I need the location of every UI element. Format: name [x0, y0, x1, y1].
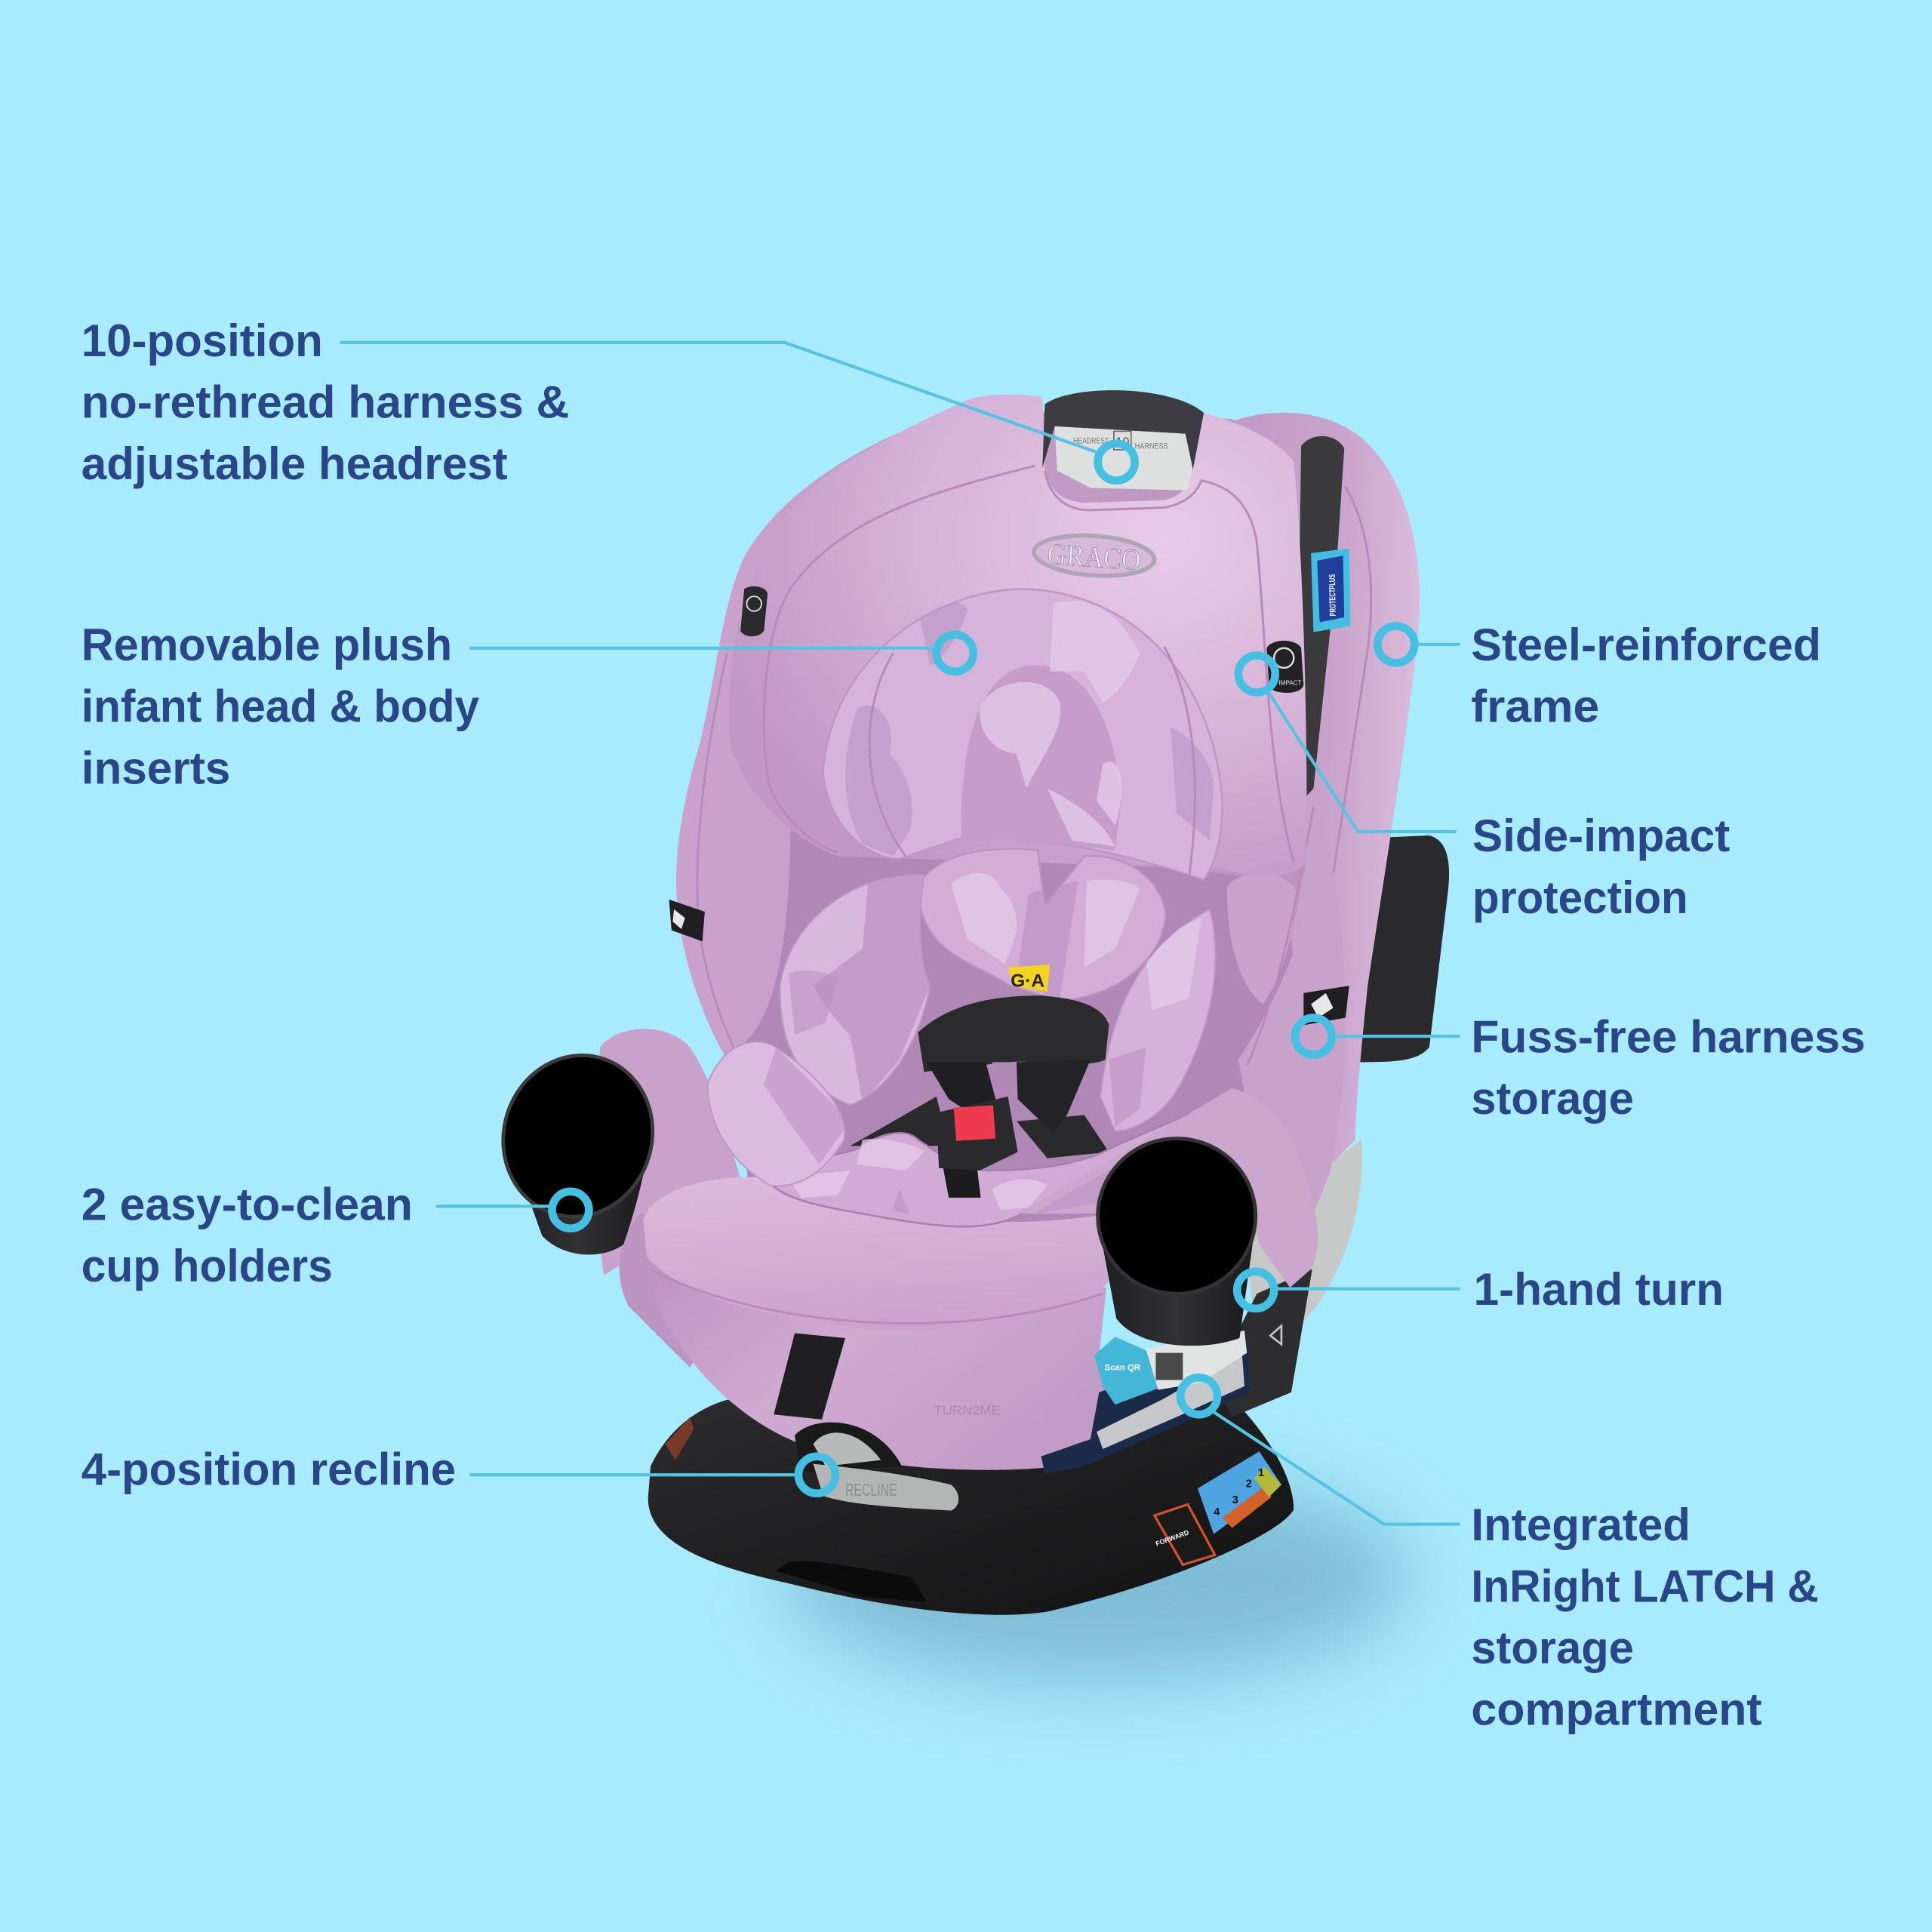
outer left seat side — [620, 1214, 740, 1367]
cast shadow — [783, 1472, 1411, 1682]
callout: infant inserts: Removable plush — [82, 619, 452, 670]
installation labels: Scan QR — [1105, 1364, 1140, 1373]
recline level sticker — [1198, 1451, 1281, 1534]
dark shadow beside buckle left — [851, 1097, 949, 1146]
recline level sticker: 1 — [1258, 1467, 1264, 1479]
seat bucket front — [646, 1257, 1106, 1470]
dark shadow beside buckle right — [1017, 1115, 1109, 1158]
recline level sticker: 2 — [1246, 1478, 1252, 1491]
callout: 10-position harness: no-rethread harness & — [82, 376, 569, 427]
ProtectPlus tag — [1311, 549, 1350, 632]
cushion seam — [651, 1269, 1103, 1323]
strap tag icon left — [672, 909, 685, 929]
callout: harness storage: Fuss-free harness — [1471, 1011, 1866, 1062]
right armrest — [1017, 1088, 1318, 1287]
left armrest — [592, 1029, 742, 1275]
armrest pattern — [1035, 1140, 1171, 1214]
headrest panel — [729, 395, 1306, 875]
callout: LATCH: compartment — [1471, 1684, 1762, 1735]
callout: cup holders: 2 easy-to-clean — [82, 1178, 413, 1229]
Turn2Me text: TURN2ME — [934, 1402, 1001, 1417]
left shoulder pad — [780, 869, 931, 1105]
callout: recline: 4-position recline — [82, 1443, 456, 1494]
callout: harness storage — [1295, 1011, 1866, 1124]
callout: harness storage: storage — [1471, 1072, 1634, 1124]
callout: cup holders — [82, 1178, 589, 1291]
rear black side panel — [1355, 835, 1449, 1062]
callout: infant inserts — [82, 619, 974, 793]
recline level sticker: 4 — [1214, 1506, 1220, 1518]
base red sticker left — [666, 1417, 694, 1460]
side bolster right — [1227, 874, 1297, 1004]
callout: recline — [82, 1443, 835, 1494]
callout: side impact — [1238, 656, 1730, 923]
yellow warning label: G·A — [1011, 971, 1044, 992]
right shoulder pad — [1100, 909, 1215, 1131]
callout: steel frame: frame — [1471, 681, 1599, 732]
left impact badge — [740, 586, 768, 636]
forward facing sticker — [1155, 1504, 1215, 1564]
callout: LATCH: storage — [1471, 1622, 1634, 1673]
lower left pad — [707, 1041, 851, 1186]
right impact badge — [1266, 641, 1303, 693]
callout: LATCH: InRight LATCH & — [1471, 1560, 1819, 1611]
chest clip and harness straps — [918, 995, 1109, 1134]
height indicator: HEADREST — [1073, 437, 1109, 446]
grey turn shell — [1244, 1140, 1362, 1343]
left cup holder — [482, 1036, 673, 1254]
recline handle — [795, 1423, 958, 1511]
seat cushion — [643, 1177, 1109, 1331]
installation labels — [1041, 1331, 1250, 1474]
callout: 10-position harness — [82, 315, 1135, 489]
triangle icon — [1270, 1326, 1281, 1344]
strap tag right — [1303, 986, 1349, 1025]
buckle strap — [941, 1158, 981, 1198]
recline handle: RECLINE — [845, 1480, 897, 1500]
seat front wing — [1238, 801, 1345, 1232]
ProtectPlus tag: PROTECTPLUS — [1328, 574, 1338, 616]
callout: 1-hand turn — [1237, 1263, 1724, 1315]
shell seam left — [697, 653, 752, 1084]
car seat illustration — [482, 390, 1449, 1615]
recline strap — [774, 1334, 845, 1420]
callout: LATCH: Integrated — [1471, 1499, 1690, 1550]
recline level sticker: 3 — [1232, 1494, 1238, 1506]
callout: steel frame — [1377, 619, 1821, 732]
right impact badge: IMPACT — [1278, 680, 1302, 687]
callout: side impact: protection — [1472, 872, 1688, 923]
callout: 10-position harness: 10-position — [82, 315, 323, 366]
callout: LATCH — [1180, 1377, 1819, 1735]
callout: infant inserts: infant head & body — [82, 681, 479, 732]
frame slit — [1297, 436, 1344, 807]
callout: side impact: Side-impact — [1472, 810, 1730, 861]
strap tag left — [669, 900, 705, 941]
forward facing sticker: FORWARD — [1155, 1528, 1190, 1548]
Graco logo: GRACO — [1046, 538, 1142, 577]
head insert — [823, 589, 1223, 880]
callout: 1-hand turn: 1-hand turn — [1474, 1263, 1724, 1315]
callout: cup holders: cup holders — [82, 1240, 333, 1291]
callout: steel frame: Steel-reinforced — [1471, 619, 1821, 670]
frame seam — [1334, 487, 1371, 875]
base — [648, 1398, 1294, 1615]
height indicator — [1055, 426, 1192, 491]
wing seam — [1247, 807, 1313, 1066]
height indicator: 10 — [1115, 435, 1129, 449]
headrest seam — [764, 466, 1294, 863]
headrest handle — [1042, 390, 1204, 471]
right cup holder — [1097, 1139, 1257, 1346]
lower body insert — [767, 1094, 1238, 1226]
callout: 10-position harness: adjustable headrest — [82, 438, 508, 489]
seat buckle — [937, 1097, 1018, 1171]
base cutout — [777, 1561, 927, 1601]
height indicator: HARNESS — [1135, 441, 1168, 451]
outer shell — [676, 409, 1306, 1244]
inner seat well — [740, 826, 1294, 1244]
yellow warning label — [1008, 964, 1050, 992]
strap tag icon right — [1311, 993, 1334, 1018]
rear frame shell — [1232, 413, 1420, 1189]
callout: infant inserts: inserts — [82, 742, 230, 793]
chest pad — [918, 849, 1165, 1001]
turn mechanism dark — [1214, 1269, 1312, 1417]
